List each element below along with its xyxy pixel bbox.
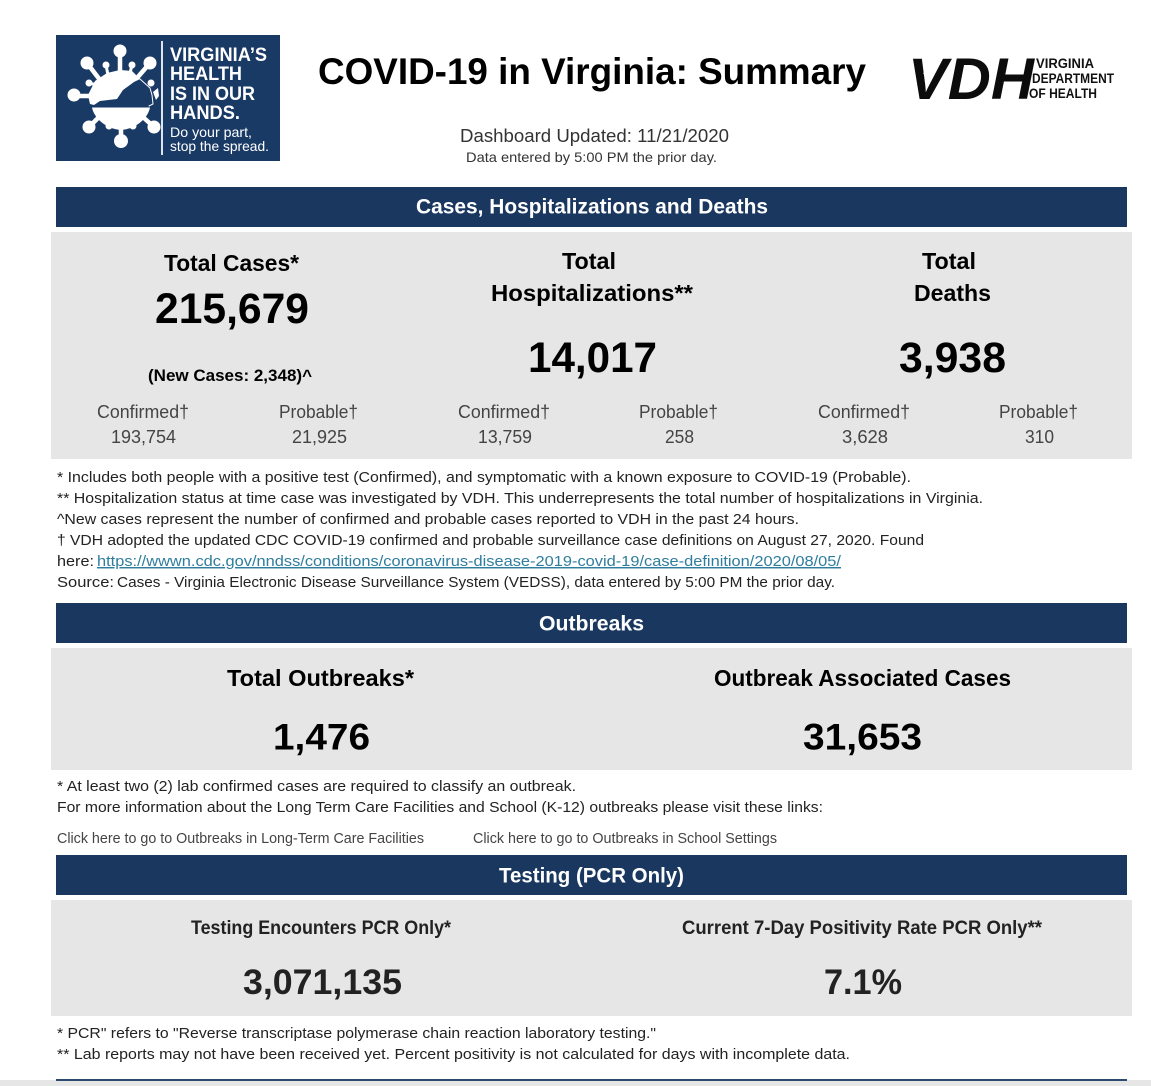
testing encounters: 3,071,135 [243, 963, 402, 1002]
total hospitalizations: 13,759 [478, 427, 532, 447]
footnotes: cases: https://wwwn.cdc.gov/nndss/conditions/coronavirus-disease-2019-covid-19/case-definition/2020/08/05/ [97, 554, 842, 570]
total cases: (New Cases: 2,348)^ [148, 366, 312, 385]
heading: cases, hospitalizations and deaths: Cases, Hospitalizations and Deaths [416, 196, 768, 218]
VDH name [1029, 56, 1115, 101]
outbreak associated cases: 31,653 [803, 716, 922, 758]
footnotes: cases: here: [57, 554, 94, 570]
heading: cases, hospitalizations and deaths [56, 187, 1127, 227]
footnotes: cases: ** Hospitalization status at time case was investigated by VDH. This underrepresents the total number of hospitalizations in Virginia. [57, 491, 983, 507]
footnotes: outbreaks [57, 779, 823, 816]
footnotes: testing: ** Lab reports may not have been received yet. Percent positivity is not calculated for days with incomplete data. [57, 1047, 850, 1063]
logo text: HEALTH [170, 64, 242, 85]
total deaths: Probable† [999, 402, 1078, 422]
logo text: HANDS. [170, 103, 240, 124]
total outbreaks: 1,476 [273, 716, 370, 758]
heading: outbreaks [56, 603, 1127, 643]
footnotes: outbreaks: * At least two (2) lab confirmed cases are required to classify an outbreak. [57, 779, 576, 795]
footnotes: testing [57, 1026, 850, 1063]
link: long-term care outbreaks: Click here to go to Outbreaks in Long-Term Care Facilities [57, 831, 424, 847]
total cases: Total Cases* [164, 250, 299, 276]
logo text: stop the spread. [170, 138, 269, 154]
total deaths: Deaths [914, 280, 991, 306]
total deaths [818, 248, 1078, 447]
positivity rate: Current 7-Day Positivity Rate PCR Only** [682, 918, 1043, 939]
title: COVID-19 in Virginia: Summary [318, 51, 866, 92]
testing encounters [191, 918, 452, 1002]
total hospitalizations: 14,017 [528, 334, 657, 382]
logo text: IS IN OUR [170, 84, 255, 105]
outbreak associated cases [714, 665, 1011, 758]
VDH name: OF HEALTH [1029, 86, 1097, 101]
total hospitalizations: 258 [665, 427, 694, 447]
total deaths: 310 [1025, 427, 1054, 447]
footnotes: outbreaks: For more information about the Long Term Care Facilities and School (K-12) outbreaks please visit these links: [57, 800, 823, 816]
footnotes: cases: Source: [57, 575, 114, 591]
total deaths: Confirmed† [818, 402, 910, 422]
positivity rate: 7.1% [824, 963, 902, 1002]
total deaths: 3,938 [899, 334, 1006, 382]
total hospitalizations: Confirmed† [458, 402, 550, 422]
footnotes: testing: * PCR" refers to "Reverse transcriptase polymerase chain reaction laboratory testing." [57, 1026, 656, 1042]
footnotes: cases: † VDH adopted the updated CDC COVID-19 confirmed and probable surveillance case definitions on August 27, 2020. Found [57, 533, 924, 549]
heading: outbreaks: Outbreaks [539, 612, 644, 636]
footnotes: cases: * Includes both people with a positive test (Confirmed), and symptomatic with a known exposure to COVID-19 (Probable). [57, 470, 911, 486]
panel: outbreaks [51, 648, 1132, 770]
outbreak associated cases: Outbreak Associated Cases [714, 665, 1011, 691]
total cases [97, 250, 358, 447]
icon: virus [68, 44, 160, 148]
footnotes: cases: ^New cases represent the number of confirmed and probable cases reported to VDH in the past 24 hours. [57, 512, 799, 528]
footnotes: cases: Cases - Virginia Electronic Disease Surveillance System (VEDSS), data entered by 5:00 PM the prior day. [117, 575, 835, 591]
total hospitalizations: Probable† [639, 402, 718, 422]
total cases: 193,754 [111, 427, 176, 447]
footnotes: cases [57, 470, 983, 591]
VDH name: DEPARTMENT [1032, 71, 1115, 86]
panel: testing [51, 900, 1132, 1016]
testing encounters: Testing Encounters PCR Only* [191, 918, 452, 939]
logo text: Do your part, [170, 124, 252, 140]
heading: testing: Testing (PCR Only) [499, 864, 684, 888]
total deaths: 3,628 [842, 427, 888, 447]
positivity rate [682, 918, 1043, 1002]
total cases: Probable† [279, 402, 358, 422]
total hospitalizations: Hospitalizations** [491, 280, 693, 306]
total cases: 215,679 [155, 285, 309, 333]
data entry note: Data entered by 5:00 PM the prior day. [466, 149, 717, 165]
panel: cases, hospitalizations and deaths [51, 232, 1132, 459]
logo: Virginia's Health Is In Our Hands [56, 35, 280, 161]
logo text [170, 45, 269, 154]
total hospitalizations: Total [562, 248, 616, 274]
total cases: Confirmed† [97, 402, 189, 422]
total hospitalizations [458, 248, 718, 447]
heading: testing [56, 855, 1127, 895]
total cases: 21,925 [292, 427, 347, 447]
logo text: VIRGINIA’S [170, 45, 267, 66]
dashboard updated date: Dashboard Updated: 11/21/2020 [460, 126, 729, 146]
VDH letters: VDH [908, 47, 1035, 112]
logo: VDH [908, 47, 1115, 112]
total deaths: Total [922, 248, 976, 274]
total outbreaks [227, 665, 414, 758]
link: school outbreaks: Click here to go to Outbreaks in School Settings [473, 831, 777, 847]
VDH name: VIRGINIA [1036, 56, 1094, 71]
total outbreaks: Total Outbreaks* [227, 665, 414, 691]
